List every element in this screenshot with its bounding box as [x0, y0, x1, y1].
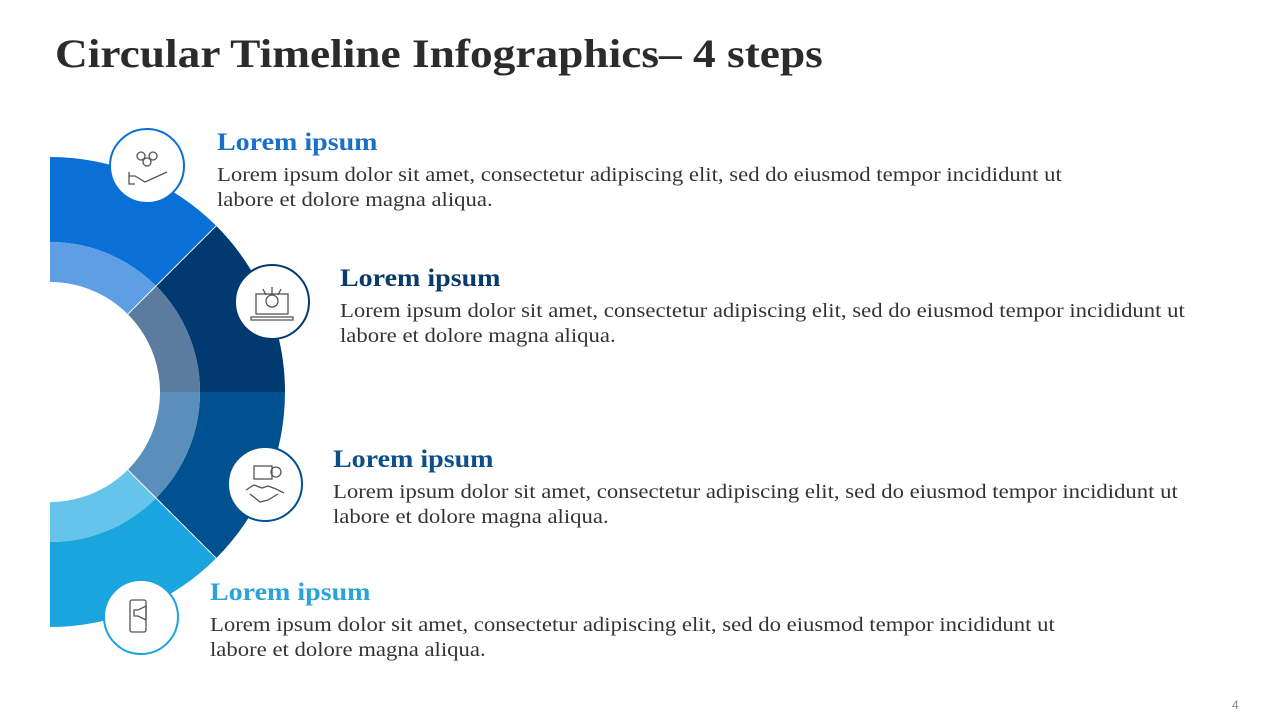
text block 3: Lorem ipsum dolor sit amet, consectetur adipiscing elit, sed do eiusmod tempor incididunt ut — [333, 482, 1178, 503]
text block 1: Lorem ipsum — [217, 129, 378, 156]
text block 2: Lorem ipsum dolor sit amet, consectetur adipiscing elit, sed do eiusmod tempor incididunt ut — [340, 301, 1185, 322]
text block 1: labore et dolore magna aliqua. — [217, 190, 493, 211]
text block 3: labore et dolore magna aliqua. — [333, 507, 609, 528]
icon: laptop dollar — [235, 265, 309, 339]
page number: 4 — [1232, 698, 1239, 712]
segment 4 — [50, 470, 216, 627]
text block 4: Lorem ipsum — [210, 579, 371, 606]
text block 2: labore et dolore magna aliqua. — [340, 326, 616, 347]
title: Circular Timeline Infographics– 4 steps — [55, 31, 823, 76]
text block 4: labore et dolore magna aliqua. — [210, 640, 486, 661]
text block 1: Lorem ipsum dolor sit amet, consectetur adipiscing elit, sed do eiusmod tempor incididunt ut — [217, 165, 1062, 186]
text block 4: Lorem ipsum dolor sit amet, consectetur adipiscing elit, sed do eiusmod tempor incididunt ut — [210, 615, 1055, 636]
text block 3 — [333, 446, 1178, 528]
segment 1 — [50, 157, 216, 314]
text block 3: Lorem ipsum — [333, 446, 494, 473]
text block 2 — [340, 265, 1185, 347]
text block 1 — [217, 129, 1062, 211]
icon: briefcase handshake — [228, 447, 302, 521]
segment 3 — [128, 392, 285, 558]
icon: hand with people — [110, 129, 184, 203]
segment 2 — [128, 226, 285, 392]
text block 4 — [210, 579, 1055, 661]
text block 2: Lorem ipsum — [340, 265, 501, 292]
icon: phone megaphone — [104, 580, 178, 654]
